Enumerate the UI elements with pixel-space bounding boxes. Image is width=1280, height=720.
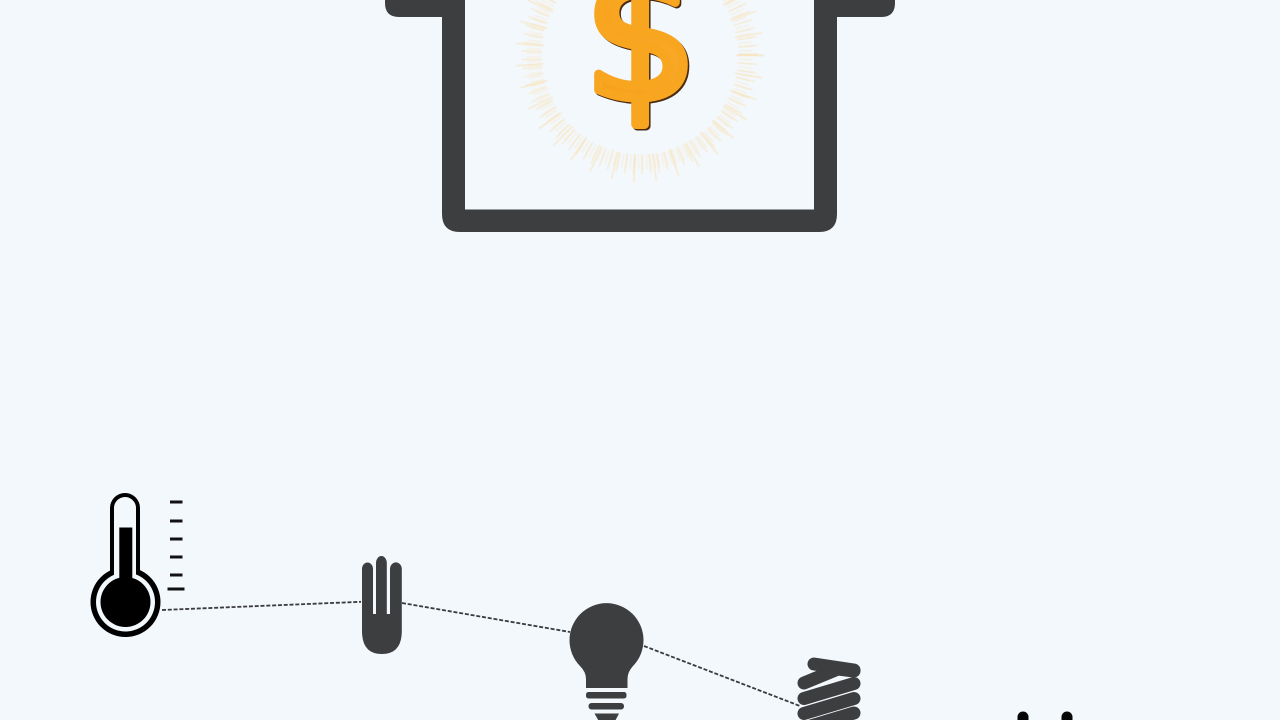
icon: plug prongs: [1018, 712, 1072, 720]
icon: fluorescent tube bulb: [362, 556, 402, 654]
icon: thermometer: [90, 493, 184, 637]
icon: incandescent light bulb: [569, 603, 644, 720]
connector: dashed line through energy icons: [162, 602, 800, 706]
icon: house outline: [385, 0, 895, 232]
icon: compact fluorescent spiral bulb: [804, 664, 854, 720]
temperature scale ticks: [168, 500, 184, 590]
icon: glow rays around dollar: [530, 0, 750, 168]
